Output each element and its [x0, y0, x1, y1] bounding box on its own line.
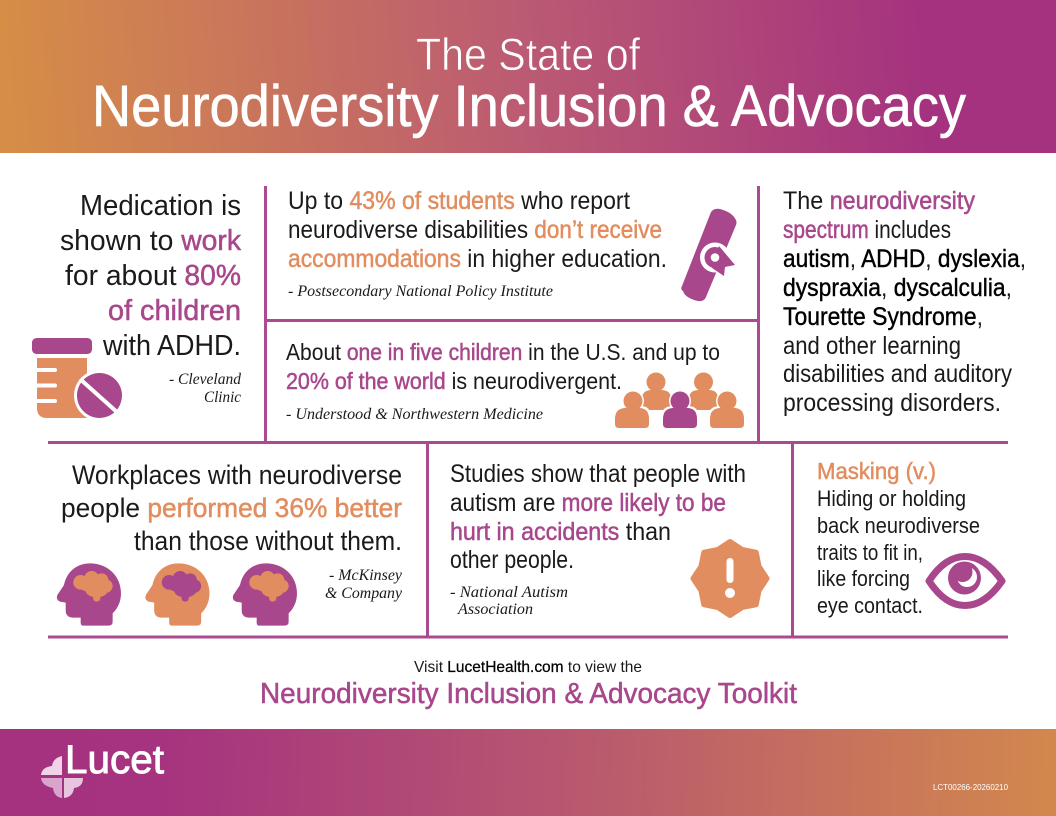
logo: Lucet: [41, 738, 164, 798]
text: prevalence statistic: 20% of the world is neurodivergent.: [286, 368, 622, 394]
text: medication statistic: with ADHD.: [102, 330, 241, 362]
text: toolkit link: Neurodiversity Inclusion & Advocacy Toolkit: [260, 678, 797, 710]
icon: head with brain 2: [145, 563, 209, 626]
text: medication statistic: for about 80%: [65, 260, 241, 292]
text: accident statistic: hurt in accidents than: [450, 518, 671, 546]
call to action: [260, 659, 797, 710]
text: workplace statistic: Workplaces with neurodiverse: [72, 460, 402, 490]
title: [92, 29, 966, 139]
text: accommodations statistic: neurodiverse disabilities don’t receive: [288, 216, 662, 244]
text: visit line: Visit LucetHealth.com to view the: [414, 659, 642, 676]
panel: accidents: [450, 460, 766, 618]
source: Cleveland Clinic: - Cleveland: [169, 371, 241, 388]
text: masking definition: eye contact.: [817, 593, 923, 618]
panel: workplaces: [57, 460, 402, 626]
title: The State of: [416, 29, 640, 80]
icon: pill bottle: [32, 338, 125, 421]
panel: neurodiversity spectrum: The neurodiversity: [783, 187, 975, 215]
icon: group of people: [613, 372, 746, 431]
source: McKinsey and Company: [325, 567, 402, 602]
panel: neurodiversity spectrum: dyspraxia, dyscalculia,: [783, 274, 1012, 302]
text: masking definition: Hiding or holding: [817, 486, 966, 511]
panel: medication: [32, 190, 241, 421]
source: Cleveland Clinic: [169, 371, 241, 406]
panel: neurodiversity spectrum: spectrum includes: [783, 216, 951, 244]
text: accommodations statistic: accommodations in higher education.: [288, 245, 667, 273]
text: medication statistic: of children: [108, 295, 241, 327]
text: masking definition: Masking (v.): [817, 458, 936, 484]
text: workplace statistic: than those without them.: [134, 526, 402, 556]
source: McKinsey and Company: - McKinsey: [329, 567, 402, 584]
text: accident statistic: autism are more likely to be: [450, 489, 726, 517]
icon: diploma scroll: [681, 209, 736, 301]
source: Understood and Northwestern Medicine: - Understood & Northwestern Medicine: [286, 406, 543, 423]
panel: neurodiversity spectrum: Tourette Syndrome,: [783, 303, 983, 331]
document code: LCT00266-20260210: [933, 783, 1009, 792]
panel: masking: [817, 458, 1002, 618]
text: workplace statistic: people performed 36% better: [61, 493, 402, 523]
text: masking definition: [817, 458, 980, 618]
title: Neurodiversity Inclusion & Advocacy: [92, 74, 966, 139]
icon: head with brain 3: [233, 563, 297, 626]
text: accommodations statistic: [288, 187, 667, 273]
icon: eye: [929, 556, 1002, 606]
source: Postsecondary National Policy Institute: - Postsecondary National Policy Institute: [288, 283, 553, 300]
source: McKinsey and Company: & Company: [325, 585, 402, 602]
text: masking definition: back neurodiverse: [817, 513, 980, 538]
footer banner: [0, 729, 1056, 816]
text: accommodations statistic: Up to 43% of students who report: [288, 187, 630, 215]
text: accident statistic: Studies show that people with: [450, 460, 746, 488]
text: medication statistic: [60, 190, 241, 362]
source: Cleveland Clinic: Clinic: [204, 389, 241, 406]
text: medication statistic: shown to work: [60, 225, 241, 257]
panel: neurodiversity spectrum: processing disorders.: [783, 389, 1001, 417]
source: National Autism Association: [450, 584, 568, 618]
text: prevalence statistic: [286, 339, 720, 394]
text: prevalence statistic: About one in five children in the U.S. and up to: [286, 339, 720, 365]
header banner: [0, 0, 1056, 153]
text: accident statistic: [450, 460, 746, 574]
icon: alert badge: [694, 542, 766, 615]
icon: head with brain 1: [57, 563, 121, 626]
panel: higher education: [288, 187, 736, 301]
text: medication statistic: Medication is: [80, 190, 241, 222]
logo: Lucet: Lucet: [65, 738, 164, 782]
text: masking definition: like forcing: [817, 566, 910, 591]
panel dividers: [48, 186, 1008, 637]
panel: neurodiversity spectrum: [783, 187, 1026, 417]
text: workplace statistic: [61, 460, 402, 556]
text: accident statistic: other people.: [450, 546, 574, 574]
panel: neurodiversity spectrum: and other learning: [783, 332, 961, 360]
source: National Autism Association: Association: [457, 601, 533, 618]
text: masking definition: traits to fit in,: [817, 540, 923, 565]
source: National Autism Association: - National Autism: [450, 584, 568, 601]
panel: one in five children: [286, 339, 746, 431]
panel: neurodiversity spectrum: autism, ADHD, dyslexia,: [783, 245, 1026, 273]
panel: neurodiversity spectrum: disabilities and auditory: [783, 360, 1012, 388]
